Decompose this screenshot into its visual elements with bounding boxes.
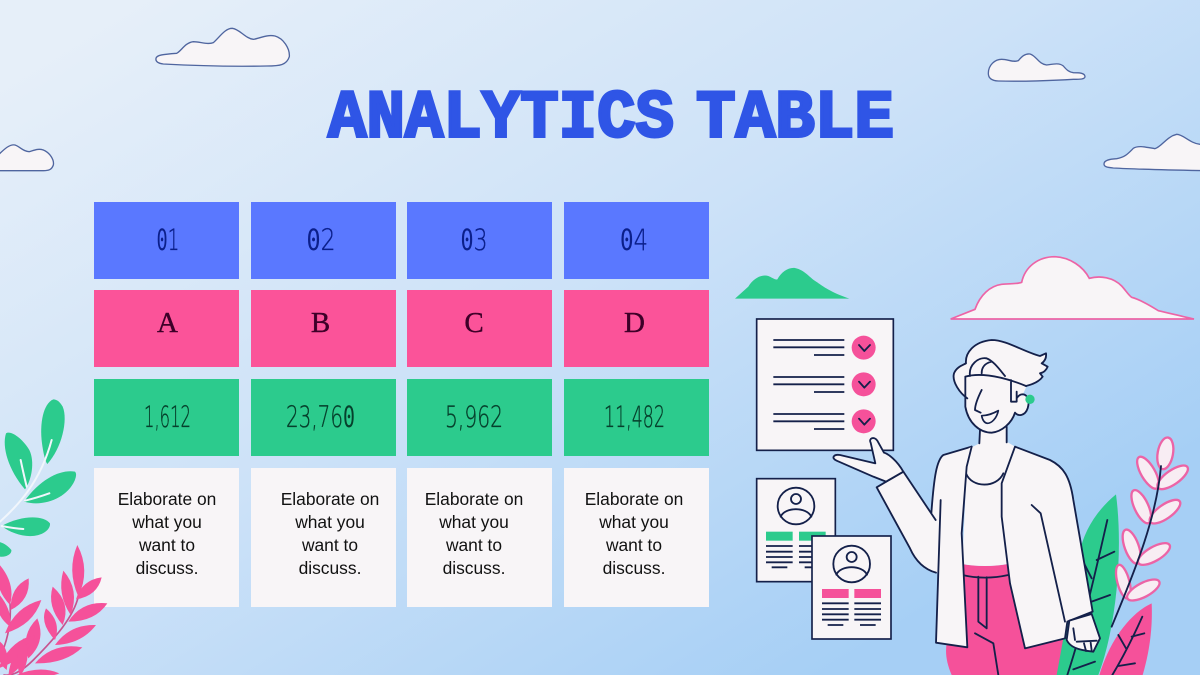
description row: Elaborate on <box>118 489 216 509</box>
title <box>328 80 894 158</box>
description row: what you <box>294 512 365 532</box>
description row: Elaborate on <box>425 489 523 509</box>
title: TABLE <box>696 80 894 158</box>
header row: 01 to 04: 04 <box>620 223 648 257</box>
value row: 11,482 <box>604 400 665 434</box>
jacket: shoulder and raised arm <box>877 447 972 573</box>
cloud: left edge <box>0 145 53 171</box>
description row: discuss. <box>136 558 198 578</box>
document: checklist <box>757 319 893 450</box>
letter row: A to D: C <box>464 307 484 339</box>
description row: want to <box>301 535 358 555</box>
plant: pink leaf <box>1099 603 1152 675</box>
value row: 23,760 <box>286 400 355 434</box>
value row <box>94 379 709 456</box>
cloud: top centre-left <box>156 28 289 66</box>
plant: pink outlined sprig <box>1112 436 1191 627</box>
letter row: A to D <box>94 290 709 367</box>
hand <box>833 438 903 482</box>
description row <box>94 468 709 607</box>
description row: discuss. <box>443 558 505 578</box>
header row: 01 to 04: 01 <box>156 223 180 257</box>
letter row: A to D: D <box>624 307 645 339</box>
person <box>833 340 1100 675</box>
cloud: green <box>735 268 849 299</box>
description row: what you <box>131 512 202 532</box>
description row: want to <box>445 535 502 555</box>
plant: pink fern, bottom left <box>0 545 107 675</box>
jacket: left panel <box>936 447 972 647</box>
value row: 5,962 <box>445 400 503 434</box>
description row: what you <box>598 512 669 532</box>
description row: want to <box>138 535 195 555</box>
plant: green leaf <box>1055 494 1119 675</box>
jacket: right panel and sleeve <box>1002 447 1093 648</box>
title: ANALYTICS <box>328 80 674 158</box>
fist <box>1067 614 1100 652</box>
description row: Elaborate on <box>585 489 683 509</box>
plant: green leaves, bottom left <box>0 399 76 557</box>
neck <box>972 423 1015 459</box>
value row: 1,612 <box>144 400 191 434</box>
description row: discuss. <box>603 558 665 578</box>
cloud: pink outline <box>951 257 1194 319</box>
cloud: right edge <box>1104 134 1200 171</box>
head <box>954 340 1048 433</box>
description row: discuss. <box>299 558 361 578</box>
document: pink profile card <box>812 536 891 639</box>
description row: Elaborate on <box>281 489 379 509</box>
letter row: A to D: A <box>157 307 178 339</box>
letter row: A to D: B <box>311 307 330 339</box>
header row: 01 to 04: 03 <box>460 223 488 257</box>
cloud: top right <box>988 54 1085 81</box>
document: green profile card <box>757 479 835 582</box>
pants <box>946 564 1063 675</box>
table <box>94 202 709 607</box>
shirt <box>962 447 1015 566</box>
earring <box>1025 395 1035 404</box>
header row: 01 to 04: 02 <box>306 223 336 257</box>
description row: what you <box>438 512 509 532</box>
description row: want to <box>605 535 662 555</box>
illustration: right side scene <box>735 257 1194 675</box>
header row: 01 to 04 <box>94 202 709 279</box>
